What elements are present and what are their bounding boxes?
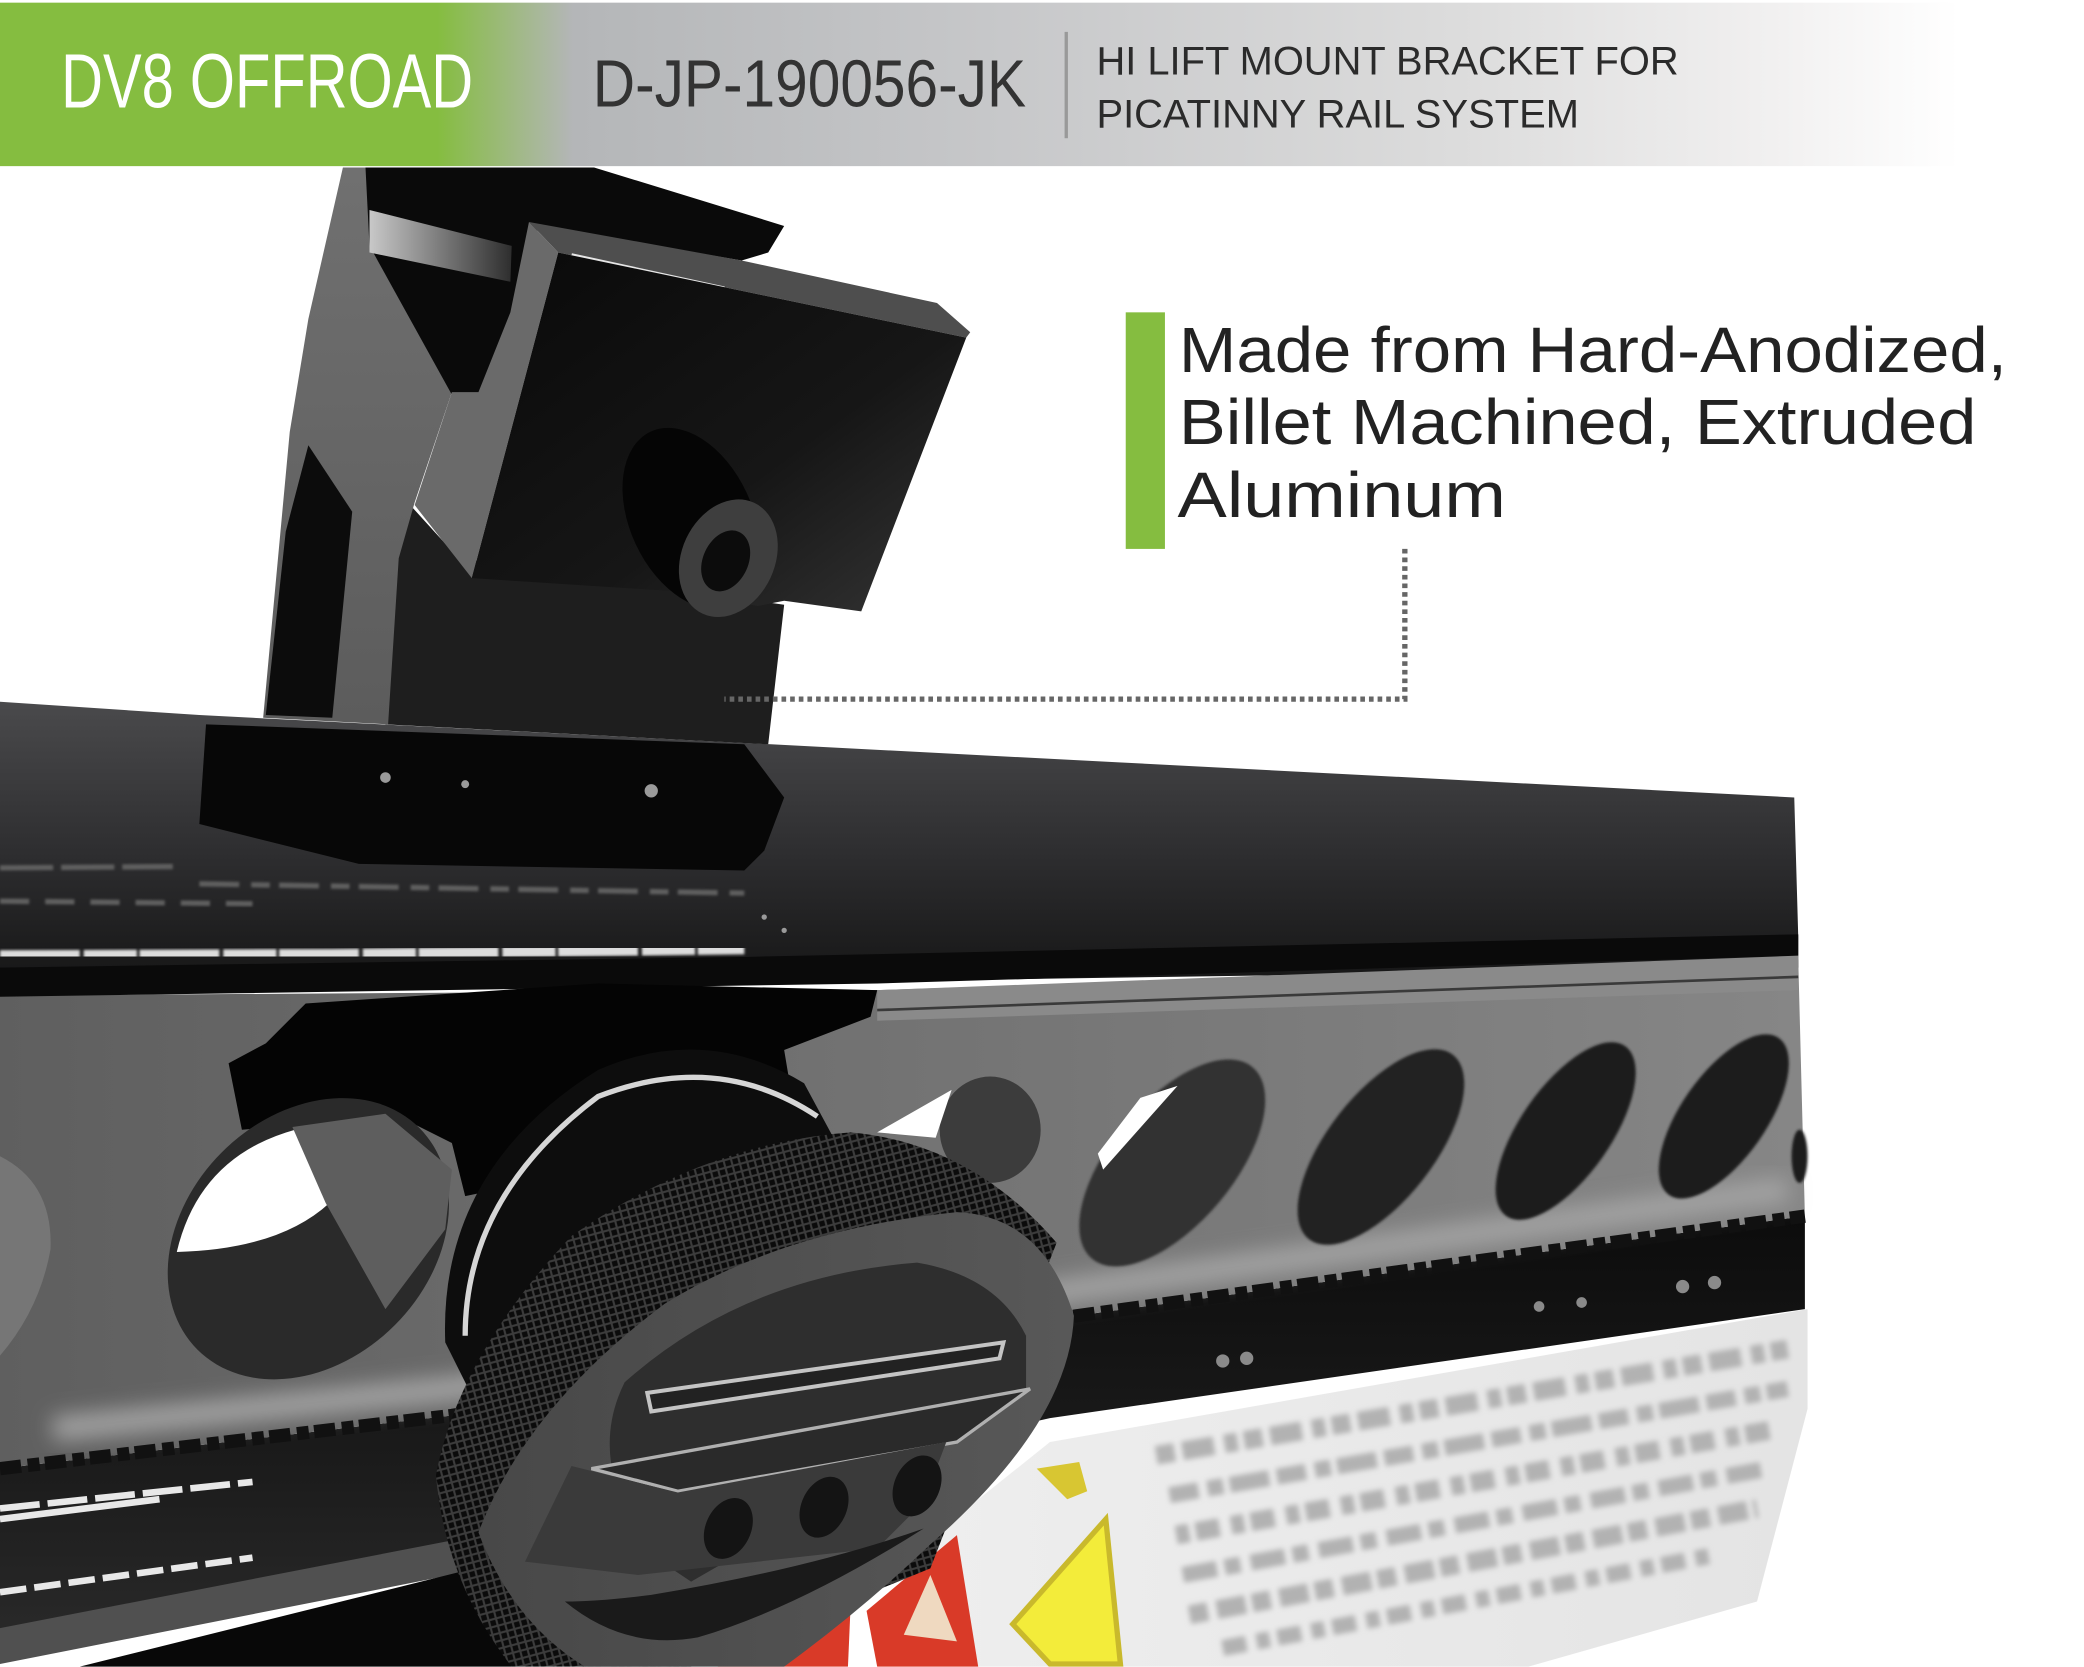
bracket: block bevel highlight	[572, 255, 724, 288]
black smudge below bracket	[199, 724, 784, 871]
flange rivet dots and streaks	[0, 1276, 1721, 1667]
bracket: left plate	[263, 167, 452, 724]
rail highlight	[0, 949, 744, 956]
red label left	[718, 1606, 851, 1667]
upper rail	[0, 702, 1798, 994]
rail speckles	[380, 772, 787, 933]
bracket: upper black part	[365, 167, 784, 395]
product title	[1096, 39, 1679, 137]
bracket: slot in plate	[266, 445, 352, 718]
callout text	[1178, 314, 2007, 531]
callout text: Aluminum	[1178, 459, 1506, 531]
bracket: square face	[472, 253, 966, 611]
product title: PICATINNY RAIL SYSTEM	[1096, 93, 1579, 137]
web light ledge	[877, 956, 1798, 1021]
ledge line	[877, 977, 1798, 1010]
brand name: DV8 OFFROAD	[61, 39, 473, 125]
knob back collar	[445, 1050, 851, 1462]
red label right	[867, 1535, 978, 1667]
photo: hi-lift jack with mounted bracket	[0, 167, 1814, 1667]
jack can body with warning label	[718, 1309, 1808, 1667]
ridge 2	[591, 1389, 1030, 1491]
web torn lower edge	[0, 1216, 1805, 1469]
callout green bar	[1126, 312, 1165, 549]
face bottom groove	[565, 1528, 924, 1640]
face lower block	[525, 1442, 946, 1575]
callout	[724, 312, 2007, 699]
callout text: Made from Hard-Anodized,	[1179, 314, 2007, 386]
warning triangle	[1013, 1519, 1120, 1664]
knurled knob	[436, 1132, 1057, 1667]
face inner recess	[610, 1263, 1026, 1582]
big hole	[111, 1041, 506, 1436]
web bright lower band	[53, 1190, 1788, 1429]
dotted leader line	[724, 549, 1405, 699]
bracket: chrome highlight	[369, 210, 512, 282]
warning triangle small	[1037, 1462, 1087, 1499]
partly hidden slot	[877, 1077, 1041, 1183]
slots	[1045, 1014, 1814, 1298]
red label glyph	[904, 1575, 957, 1641]
callout text: Billet Machined, Extruded	[1179, 386, 1976, 458]
slot white gap	[1098, 1086, 1178, 1170]
part number: D-JP-190056-JK	[593, 47, 1026, 121]
lower flange	[0, 1216, 1805, 1648]
left partial hole	[0, 1156, 51, 1356]
black shadow on web	[229, 984, 877, 1196]
perforated web face	[0, 960, 1805, 1469]
bracket: block bevel top	[529, 222, 970, 338]
product title: HI LIFT MOUNT BRACKET FOR	[1096, 39, 1679, 83]
header bar	[0, 3, 2084, 166]
knob face	[478, 1212, 1074, 1667]
bolt	[595, 406, 796, 633]
rail streaks	[0, 867, 744, 904]
ridge 1	[647, 1342, 1003, 1411]
bracket: lower block	[385, 485, 784, 744]
rail dark seam	[0, 934, 1798, 997]
face vent holes	[694, 1447, 951, 1567]
header divider	[1065, 32, 1068, 138]
bracket: block bevel left	[415, 222, 558, 578]
